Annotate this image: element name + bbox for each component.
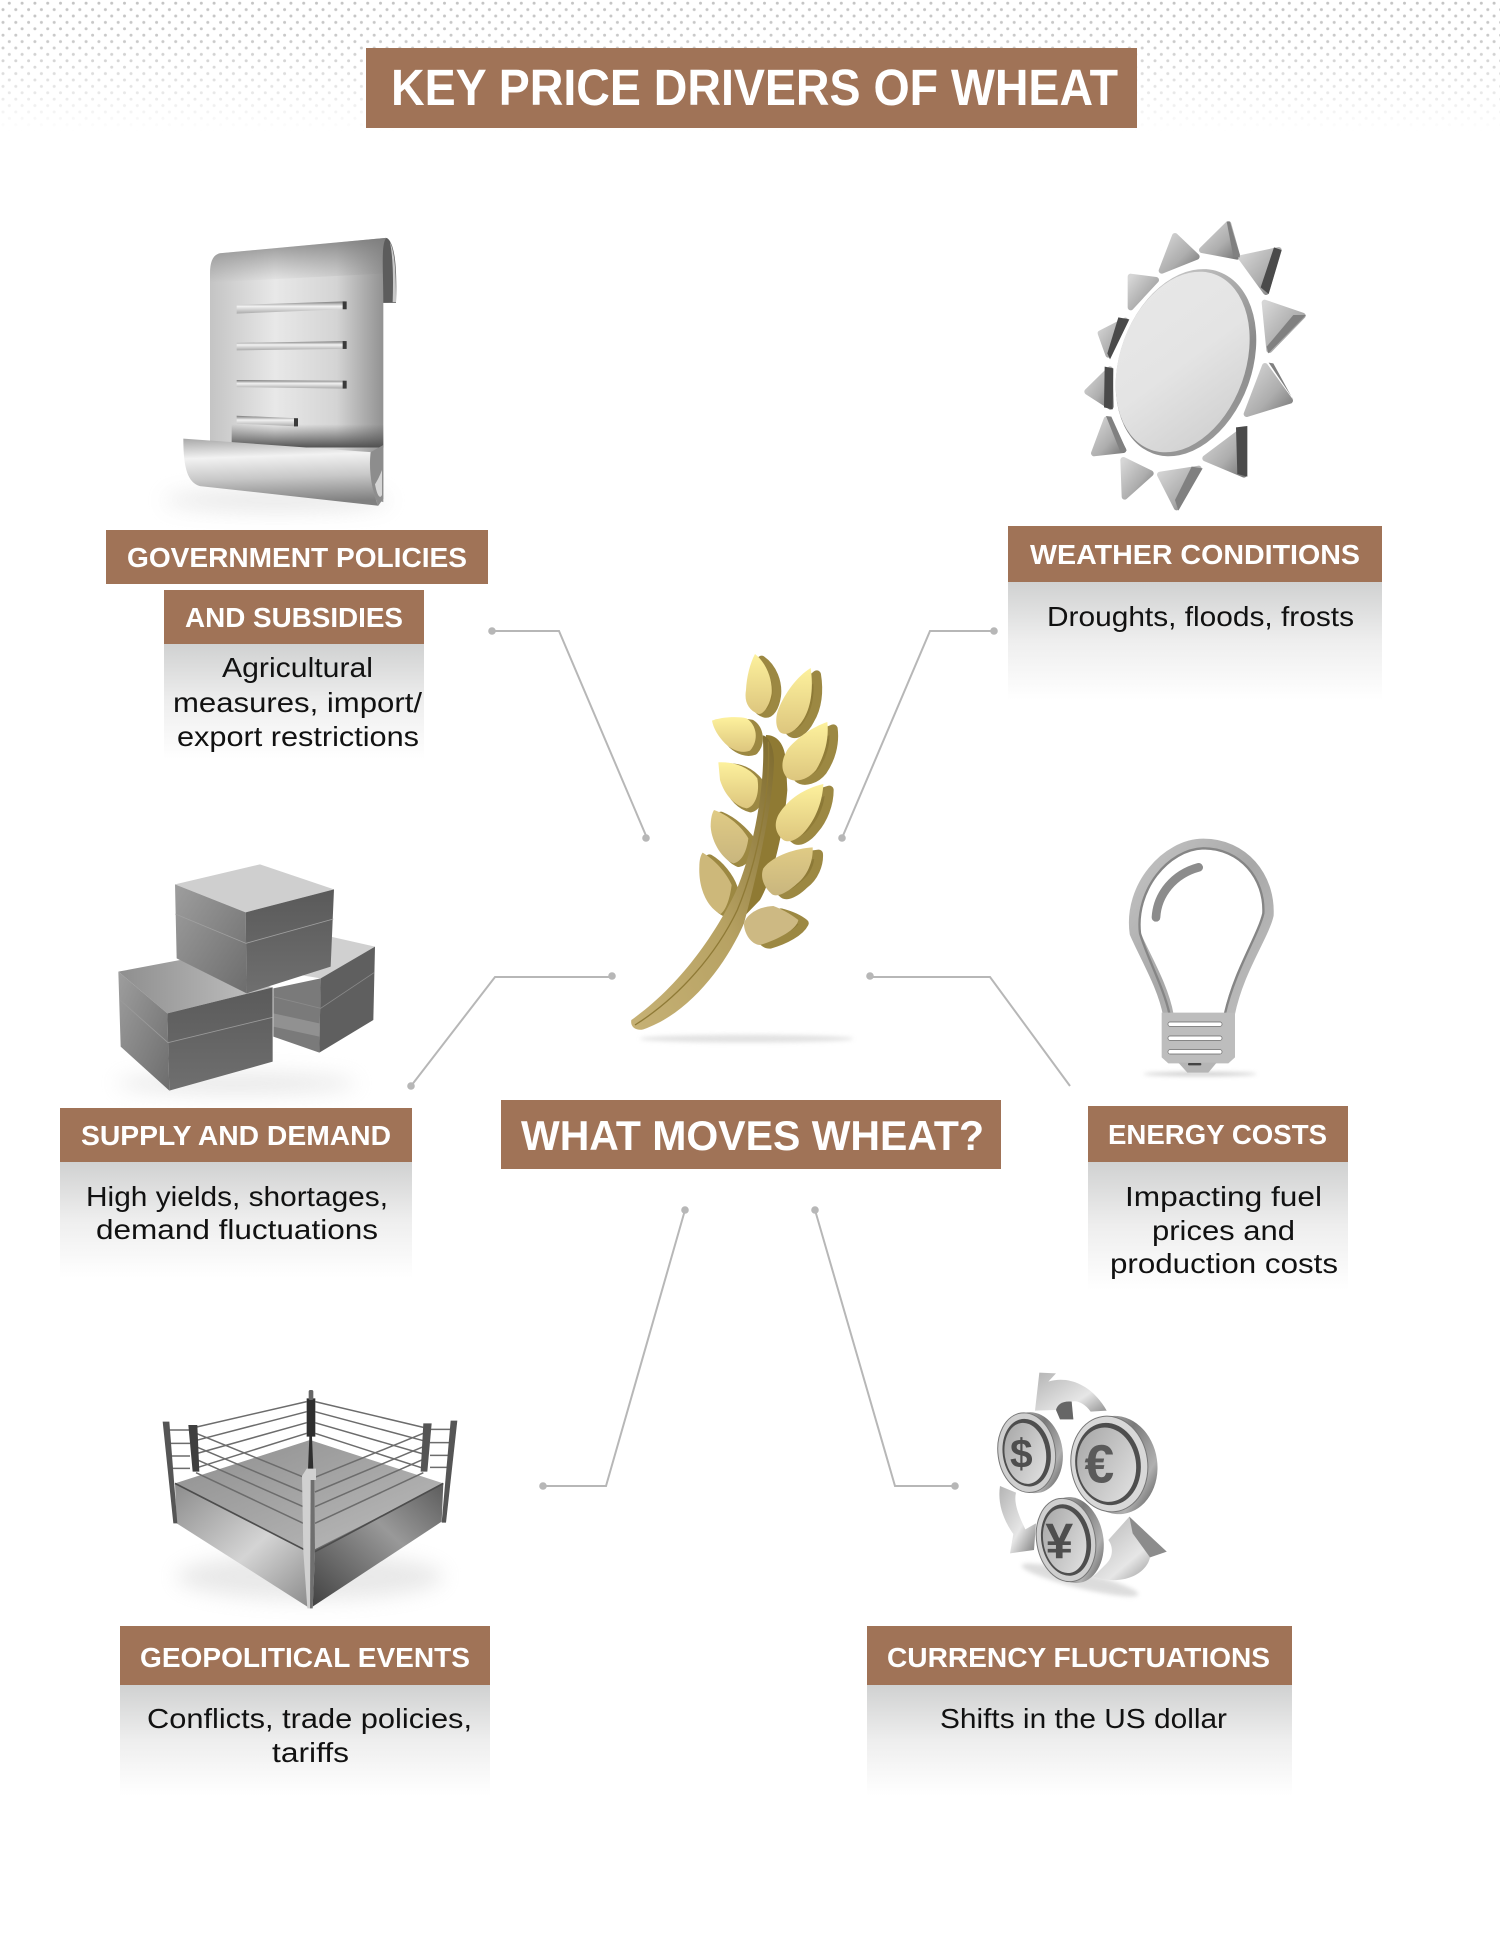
background dot pattern — [0, 0, 1500, 138]
panel: supply and demand — [60, 864, 412, 1278]
arrow: connector to geopolitical events — [543, 1210, 685, 1486]
icon: metal scroll — [163, 238, 396, 510]
text block: weather conditions description — [1008, 582, 1382, 700]
heading: geopolitical events: GEOPOLITICAL EVENTS — [140, 1642, 470, 1673]
text block: government policies description: export restrictions — [177, 721, 419, 752]
icon: metal light bulb — [1134, 844, 1268, 1076]
icon: metal currency coins with arrows: $ — [1010, 1430, 1033, 1476]
text block: supply and demand description: High yields, shortages, — [86, 1181, 388, 1212]
text block: weather conditions description: Droughts, floods, frosts — [1047, 601, 1354, 632]
icon: metal boxing ring — [163, 1390, 457, 1608]
icon: metal sun — [1087, 222, 1306, 511]
heading: geopolitical events — [120, 1626, 490, 1685]
heading: energy costs — [1088, 1106, 1348, 1162]
text block: government policies description — [164, 644, 424, 759]
panel: central question — [501, 1100, 1001, 1169]
arrow: connector dot supply and demand — [407, 972, 616, 1090]
arrow: connector to weather conditions — [842, 631, 994, 838]
panel: geopolitical events — [120, 1390, 490, 1796]
heading: supply and demand: SUPPLY AND DEMAND — [81, 1120, 391, 1151]
text block: energy costs description: prices and — [1152, 1215, 1295, 1246]
text block: currency fluctuations description — [867, 1685, 1292, 1796]
icon: metal boxes — [117, 864, 375, 1093]
arrow: connector to energy costs — [870, 977, 1070, 1086]
heading: supply and demand — [60, 1108, 412, 1162]
arrow: connector dot currency fluctuations — [811, 1206, 959, 1490]
panel: government policies — [106, 238, 488, 759]
heading: weather conditions — [1008, 526, 1382, 582]
heading: currency fluctuations — [867, 1626, 1292, 1685]
panel: weather conditions — [1008, 222, 1382, 700]
text block: geopolitical events description: Conflicts, trade policies, — [147, 1703, 472, 1734]
text block: geopolitical events description — [120, 1685, 490, 1796]
arrow: connector dot energy costs — [866, 972, 874, 980]
text block: government policies description: measures, import/ — [173, 687, 422, 718]
panel: energy costs — [1088, 844, 1348, 1290]
text block: energy costs description — [1088, 1162, 1348, 1290]
arrow: connector to supply and demand — [411, 977, 612, 1086]
text block: government policies description: Agricultural — [222, 652, 373, 683]
icon: metal currency coins with arrows: € — [1084, 1436, 1114, 1495]
panel: central question: WHAT MOVES WHEAT? — [521, 1112, 984, 1159]
text block: energy costs description: production costs — [1110, 1248, 1338, 1279]
text block: energy costs description: Impacting fuel — [1125, 1181, 1322, 1212]
heading: currency fluctuations: CURRENCY FLUCTUATIONS — [887, 1642, 1270, 1673]
panel: currency fluctuations — [867, 1373, 1292, 1796]
heading: government policies — [106, 530, 488, 584]
heading: weather conditions: WEATHER CONDITIONS — [1030, 539, 1360, 570]
text block: geopolitical events description: tariffs — [272, 1737, 349, 1768]
arrow: connector dot government policies — [488, 627, 650, 842]
heading: government policies: GOVERNMENT POLICIES — [127, 542, 467, 573]
icon: golden wheat ear — [631, 654, 853, 1043]
arrow: connector dot weather conditions — [838, 627, 998, 842]
icon: metal currency coins with arrows: ¥ — [1045, 1513, 1073, 1569]
title — [366, 48, 1137, 128]
text block: currency fluctuations description: Shifts in the US dollar — [940, 1703, 1227, 1734]
icon: metal currency coins with arrows — [993, 1373, 1167, 1602]
arrow: connector dot geopolitical events — [539, 1206, 689, 1490]
heading: and subsidies — [164, 590, 424, 644]
arrow: connector to currency fluctuations — [815, 1210, 955, 1486]
heading: and subsidies: AND SUBSIDIES — [185, 602, 403, 633]
text block: supply and demand description — [60, 1162, 412, 1278]
arrow: connector to government policies — [492, 631, 647, 838]
title: KEY PRICE DRIVERS OF WHEAT — [391, 59, 1118, 116]
heading: energy costs: ENERGY COSTS — [1108, 1119, 1327, 1150]
text block: supply and demand description: demand fluctuations — [96, 1214, 378, 1245]
